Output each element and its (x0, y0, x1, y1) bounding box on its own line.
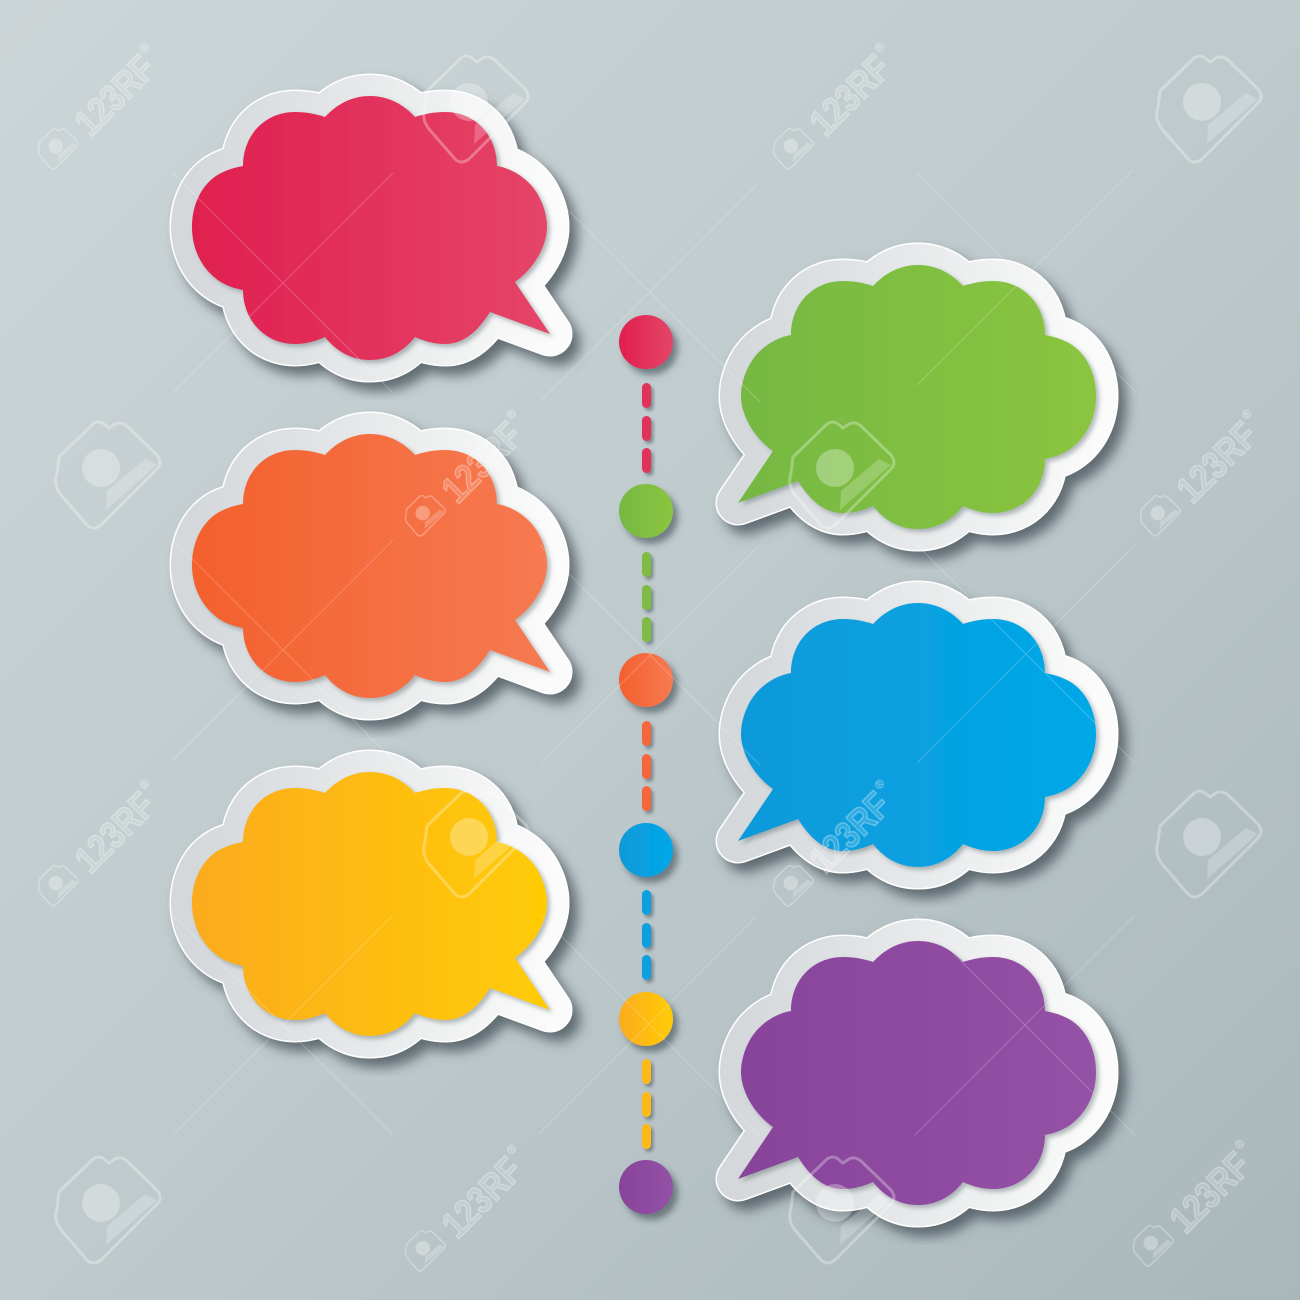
watermark: icon (424, 56, 528, 162)
dot: purple (619, 1160, 673, 1214)
watermark: 123RF logo: 123RF (434, 1150, 531, 1246)
dashes: green (642, 552, 651, 642)
speech bubble: yellow (192, 772, 550, 1036)
speech bubble: red (192, 96, 550, 360)
watermark: icon (56, 1157, 160, 1263)
speech bubble: blue (738, 603, 1096, 867)
dashes: blue (642, 890, 651, 980)
watermark: 123RF logo (18, 32, 175, 189)
watermark: 123RF logo: ® (871, 776, 888, 792)
watermark: 123RF logo: ® (503, 1141, 520, 1157)
watermark: 123RF logo: 123RF (1169, 415, 1266, 511)
watermark: 123RF logo (385, 1134, 542, 1291)
watermark: icon (424, 791, 528, 897)
watermark: 123RF logo: ® (136, 776, 153, 792)
dashes: red (642, 383, 651, 473)
dot: green (619, 484, 673, 538)
watermark: 123RF logo: ® (1238, 406, 1255, 422)
watermark: 123RF logo: 123RF (434, 415, 531, 511)
dot: yellow (619, 992, 673, 1046)
speech bubble: purple (738, 941, 1096, 1205)
timeline: dots and dashes (619, 315, 673, 1214)
watermark: 123RF logo: ® (1231, 1136, 1248, 1152)
watermark: 123RF logo: 123RF (802, 785, 899, 881)
watermark: 123RF logo (385, 399, 542, 556)
dot: blue (619, 823, 673, 877)
watermark: 123RF logo: 123RF (802, 48, 899, 144)
watermark: 123RF logo (753, 769, 910, 926)
watermark: 123RF logo (1120, 399, 1277, 556)
watermark: 123RF logo: ® (136, 39, 153, 55)
speech bubble: green (738, 265, 1096, 529)
watermark: icon (790, 1157, 894, 1263)
watermark: 123RF logo (753, 32, 910, 189)
watermark: 123RF logo: 123RF (67, 48, 164, 144)
watermark: 123RF logo: 123RF (1162, 1145, 1259, 1241)
watermark: 123RF logo (1113, 1129, 1270, 1286)
watermark: icon (56, 422, 160, 528)
watermark: 123RF logo: ® (871, 39, 888, 55)
dashes: yellow (642, 1059, 651, 1149)
watermark: 123RF logo: ® (503, 406, 520, 422)
dot: orange (619, 653, 673, 707)
speech bubble: orange (192, 434, 550, 698)
watermark: icon (1157, 56, 1261, 162)
watermark: icon (1157, 791, 1261, 897)
watermark: icon (790, 422, 894, 528)
dot: red (619, 315, 673, 369)
watermark: 123RF logo: 123RF (67, 785, 164, 881)
watermark: 123RF logo (18, 769, 175, 926)
dashes: orange (642, 721, 651, 811)
